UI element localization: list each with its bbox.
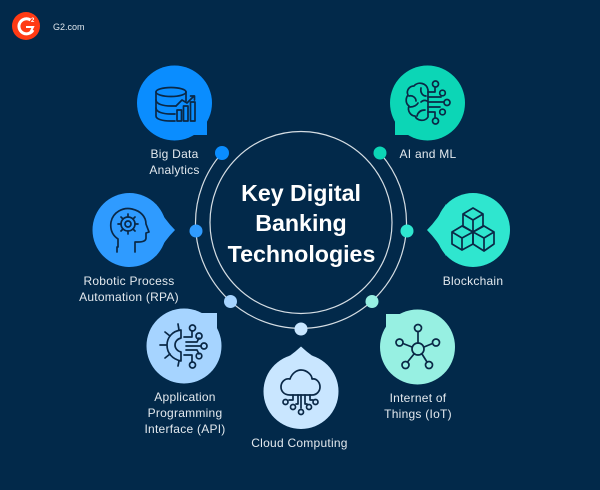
inner ring — [210, 132, 392, 314]
ring dot: IoT — [366, 295, 378, 308]
logo text: G2.com: G2.com — [53, 22, 85, 32]
label: Blockchain: Blockchain — [443, 274, 503, 288]
label: API: Interface (API) — [144, 422, 226, 436]
icon: brain circuit — [406, 81, 450, 124]
outer ring arc — [196, 153, 407, 328]
label: Cloud Computing: Cloud Computing — [251, 436, 348, 450]
title — [228, 180, 375, 267]
icon: cubes — [452, 208, 494, 251]
icon: database with bar chart — [156, 88, 195, 121]
ring dot: Cloud — [294, 322, 308, 336]
title: Technologies — [228, 241, 375, 267]
label: API — [144, 390, 226, 436]
ring dot: RPA — [190, 224, 202, 238]
label: Big Data Analytics: Big Data — [150, 147, 199, 161]
label: API: Application — [154, 390, 216, 404]
panel: Internet of Things — [380, 310, 455, 384]
icon: API circuit — [160, 324, 207, 368]
label: Big Data Analytics: Analytics — [149, 163, 200, 177]
ring dot: AI — [374, 146, 386, 160]
label: Internet of Things — [384, 391, 452, 421]
label: AI and ML: AI and ML — [400, 147, 457, 161]
label: Robotic Process Automation — [79, 274, 179, 304]
logo: G2 — [12, 12, 40, 40]
panel: AI and ML — [390, 66, 465, 140]
panel: Big Data Analytics — [137, 66, 212, 140]
icon: cloud — [281, 370, 320, 414]
label: Internet of Things: Internet of — [390, 391, 447, 405]
label: Internet of Things: Things (IoT) — [384, 407, 452, 421]
panel: Robotic Process Automation — [92, 193, 175, 267]
panel: API — [146, 308, 222, 384]
ring dot: Blockchain — [400, 224, 414, 238]
title: Key Digital — [241, 180, 361, 206]
label: API: Programming — [148, 406, 222, 420]
label: Robotic Process Automation: Automation (RPA) — [79, 290, 179, 304]
panel: Cloud Computing — [264, 346, 338, 429]
logo: G2: 2 — [31, 18, 35, 24]
icon: head with gear — [111, 209, 149, 252]
ring dot: Big Data — [215, 146, 229, 160]
title: Banking — [255, 210, 347, 236]
ring dot: API — [224, 295, 237, 308]
icon: hub network — [396, 324, 440, 368]
panel: Blockchain — [427, 193, 510, 267]
label: Big Data Analytics — [149, 147, 200, 177]
label: Robotic Process Automation: Robotic Process — [83, 274, 175, 288]
